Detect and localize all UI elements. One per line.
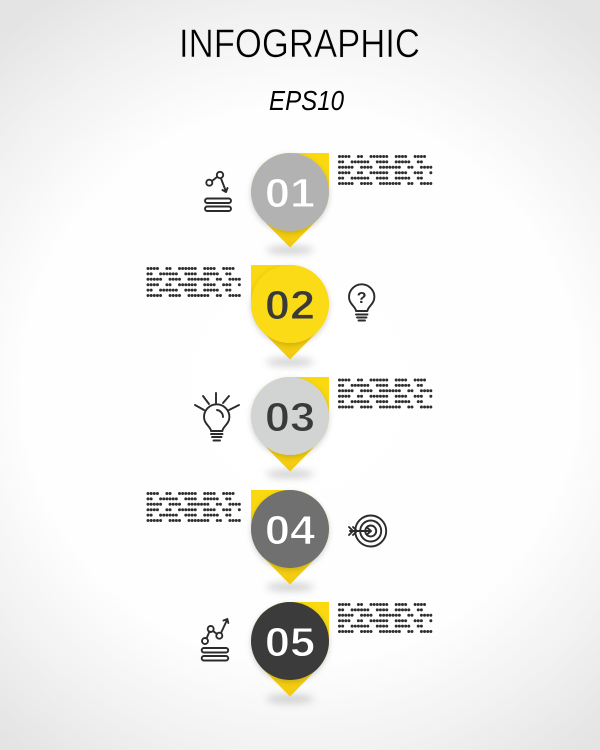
pin 05	[251, 602, 329, 703]
pin 02: 02	[265, 283, 315, 329]
text block 02	[148, 268, 239, 296]
pin 03: 03	[265, 395, 315, 441]
text block 03	[340, 380, 431, 407]
icon: question bulb	[349, 284, 374, 320]
pin 04	[251, 490, 329, 591]
pin 02	[251, 265, 329, 366]
icon: light bulb with rays	[195, 393, 239, 440]
text block 05	[340, 604, 431, 632]
text block 04	[148, 494, 239, 520]
title: INFOGRAPHIC	[179, 22, 420, 66]
icon: question bulb: ?	[357, 290, 367, 307]
pin 04: 04	[265, 508, 315, 554]
pin 01	[251, 153, 329, 254]
pin 05: 05	[265, 620, 315, 666]
subtitle: EPS10	[269, 85, 344, 116]
text block 01	[340, 156, 431, 184]
pin 01: 01	[265, 171, 315, 217]
pin 03	[251, 377, 329, 478]
icon: nodes and arrow with bars	[205, 172, 231, 211]
icon: target with arrow	[349, 516, 386, 546]
icon: growth chart with bars	[202, 619, 228, 660]
